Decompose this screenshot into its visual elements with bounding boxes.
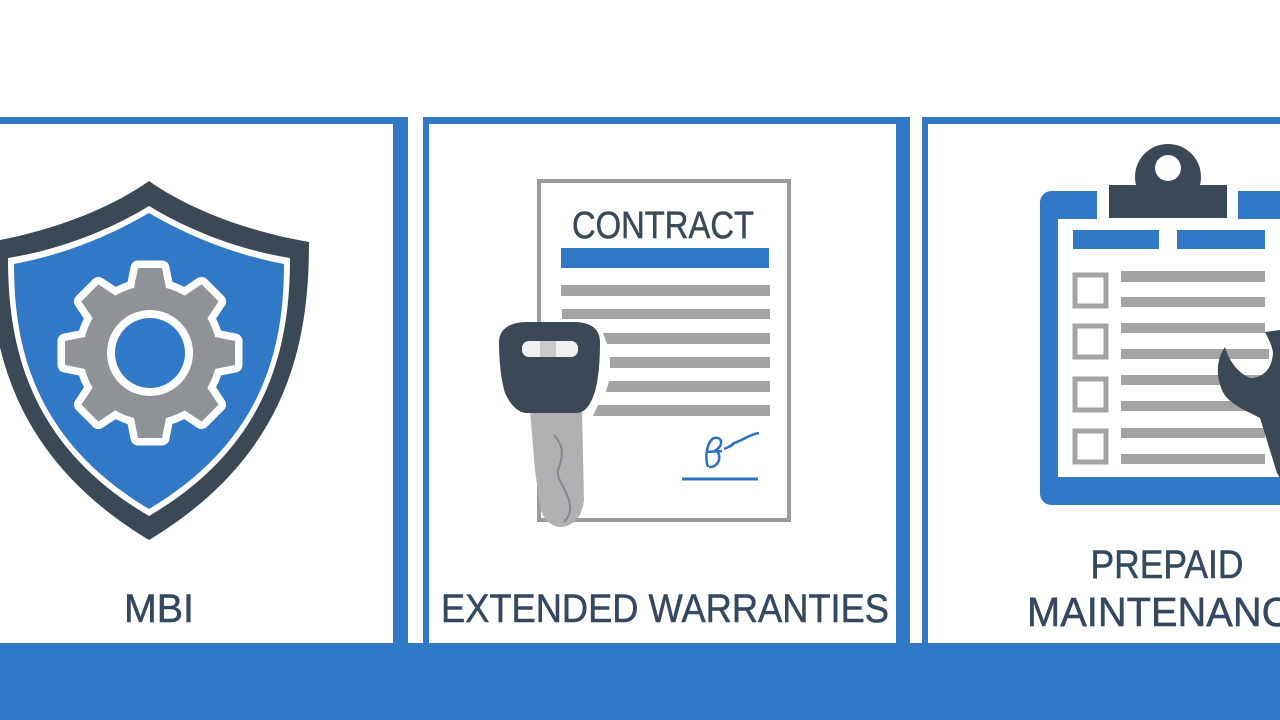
panel: Extended Warranties <box>423 117 910 643</box>
label: MBI: MBI <box>124 587 194 631</box>
icon: clipboard <box>1040 144 1280 505</box>
label: Prepaid Maintenance: PREPAID <box>1090 543 1244 587</box>
label: Extended Warranties: EXTENDED WARRANTIES <box>441 587 889 631</box>
bottom band <box>0 643 1280 720</box>
signature <box>682 433 759 479</box>
panel: MBI <box>0 117 408 643</box>
contract title: CONTRACT <box>572 205 754 247</box>
icon: contract document <box>539 181 789 520</box>
icon: shield with gear <box>0 181 309 540</box>
label: Prepaid Maintenance <box>1027 543 1280 635</box>
icon: key <box>499 322 600 527</box>
icon: gear <box>65 268 235 438</box>
clipboard clip <box>1109 144 1227 218</box>
icon: wrench <box>1218 330 1280 478</box>
panel: Prepaid Maintenance <box>922 117 1280 643</box>
